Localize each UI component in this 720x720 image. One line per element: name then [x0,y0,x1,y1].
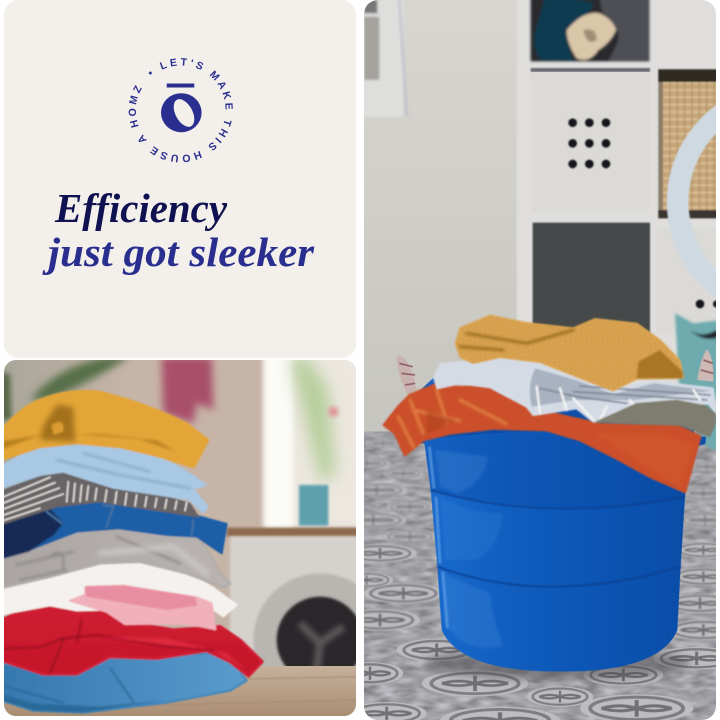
white and gray towel [434,357,717,422]
gray sweater [0,527,230,588]
woven basket cubby [658,69,720,218]
teal basket [675,313,720,453]
wall poster [360,0,407,117]
bucket shadow [423,647,690,680]
blurred shelving background [360,0,720,433]
striped shirt [0,470,198,525]
top cubby with rolled towels [531,0,649,61]
rope handles [397,349,713,397]
red shirt [0,603,262,676]
orange towel [384,383,700,492]
patterned tile floor [337,432,720,720]
panel: photo of blue laundry bucket [337,0,720,720]
light blue shirt [0,438,207,513]
panel: headline card [4,0,356,358]
blue bucket [415,377,706,672]
headline: Efficiency [54,185,228,231]
floor, bucket and towels [337,313,720,720]
white circular washer door ring [678,93,720,310]
headline: just got sleeker [42,229,315,275]
panel: photo of folded clothes stack [4,360,356,716]
white garment [0,560,236,616]
logo badge: • LET'S MAKE THIS HOUSE A HOMZ [128,58,233,162]
lower right white door [657,227,720,334]
blurred laundry room background [4,360,356,716]
headline [42,185,315,275]
door with nine holes [530,67,651,170]
navy blue jeans [0,502,227,558]
olive gray towel [597,401,716,436]
mustard yellow sweater [0,391,208,467]
clothes stack [0,391,262,713]
dark drawer [533,223,650,333]
pink garment [70,586,215,629]
mustard knit towel [456,316,683,390]
denim blue jeans, bottom [0,653,247,713]
